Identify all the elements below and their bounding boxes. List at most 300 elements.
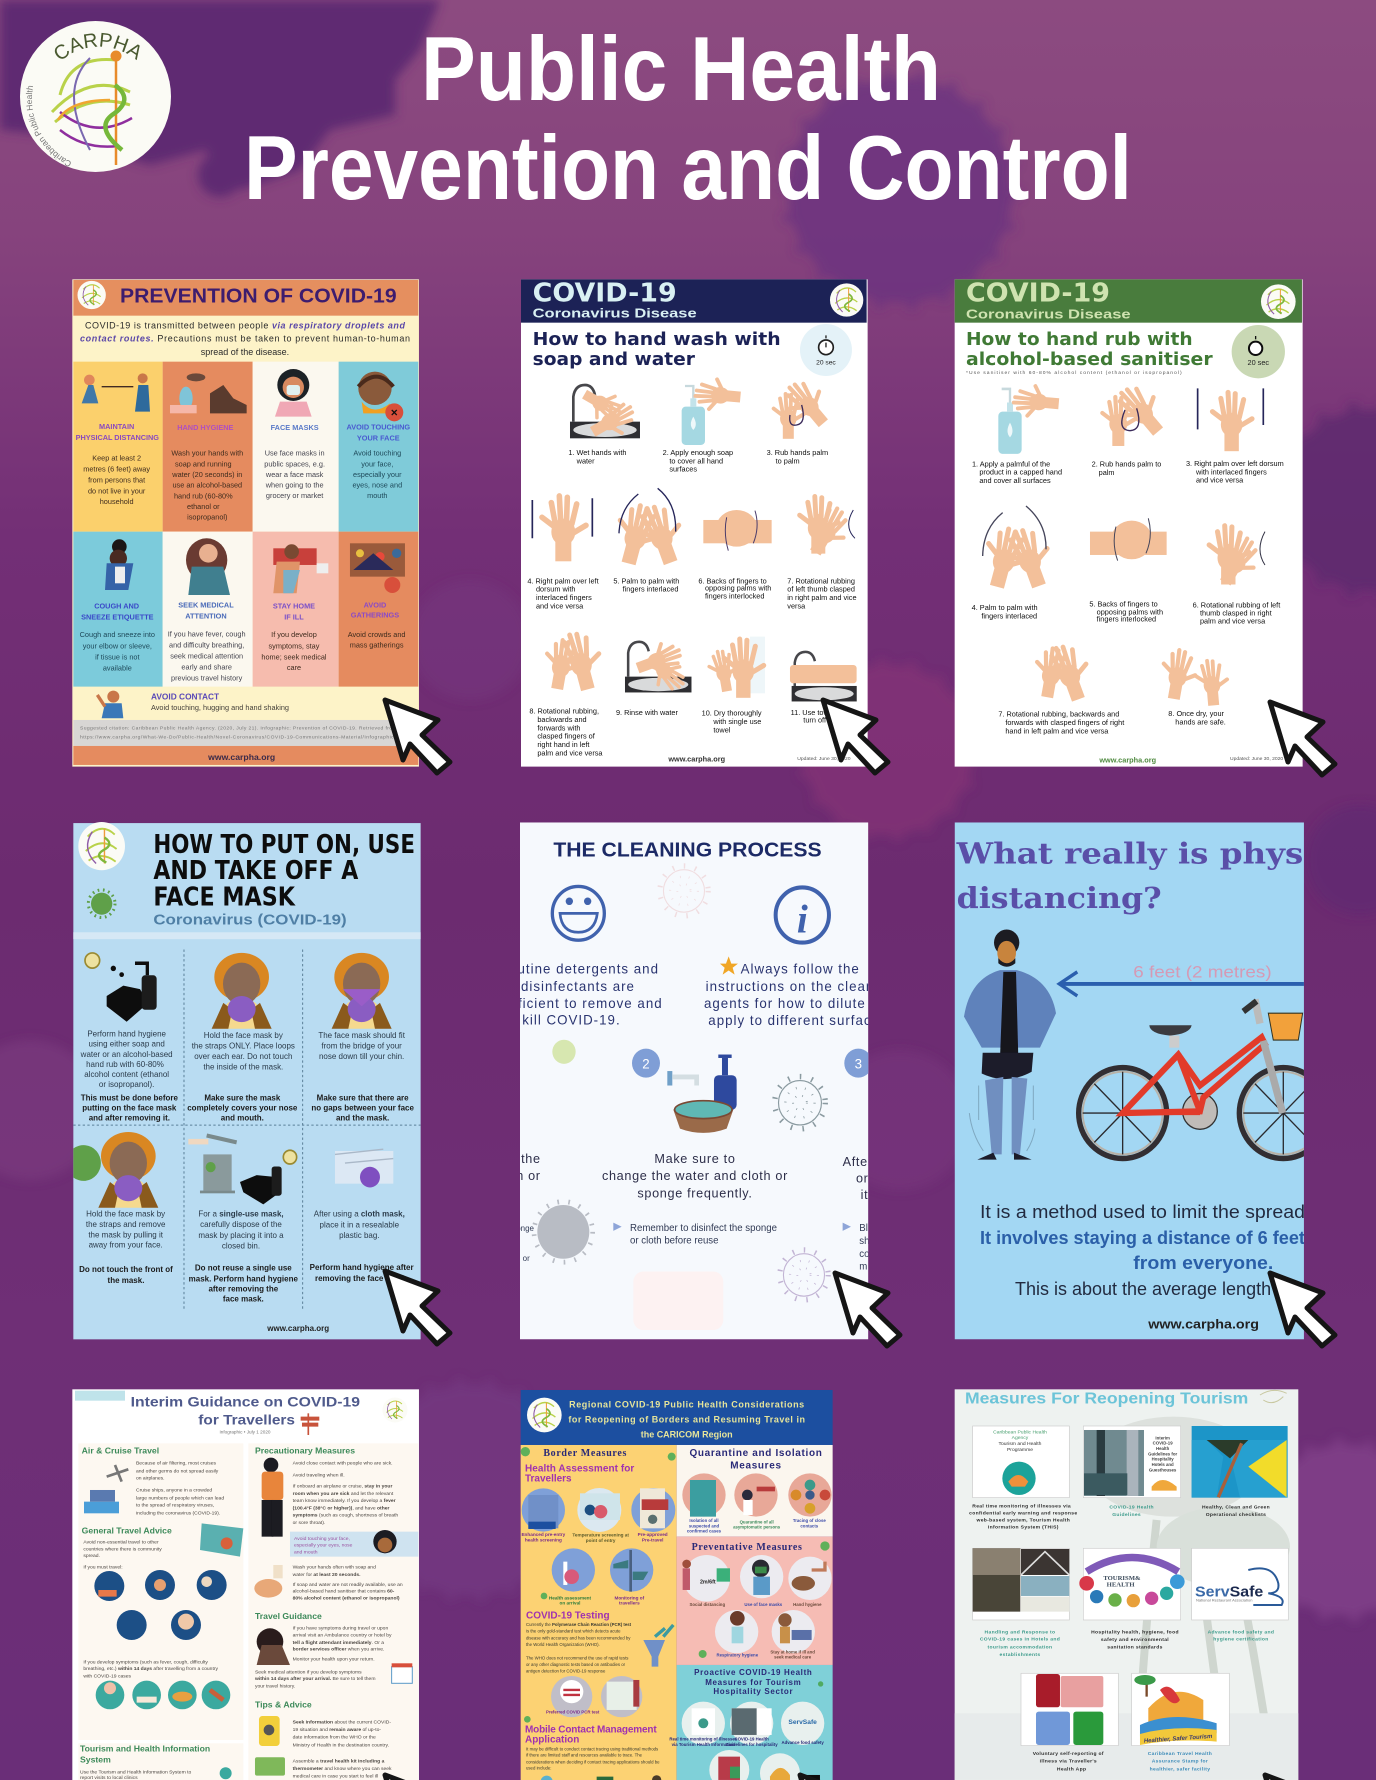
header <box>521 278 867 323</box>
tile: programme: Tourism and Health <box>999 1441 1042 1447</box>
panel body text: and difficulty breathing, <box>169 640 244 649</box>
small body text: date information from the WHO or the <box>293 1735 376 1741</box>
card: regional considerations <box>521 1390 833 1780</box>
section headings: Precautionary Measures <box>255 1445 355 1455</box>
explanation text <box>980 1201 1305 1331</box>
mask instructions: This must be done before <box>81 1093 178 1102</box>
tile captions: Health App <box>1057 1767 1086 1773</box>
quarantine panel: contacts <box>800 1523 819 1528</box>
citation and footer: https://www.carpha.org/What-We-Do/Public-Health/Novel-Coronavirus/COVID-19-Communications-Material/Infographics <box>80 735 397 741</box>
small body text: Seek medical attention if you develop symptoms <box>255 1669 362 1675</box>
mask instructions: The face mask should fit <box>318 1031 406 1040</box>
CARPHA logo <box>20 21 171 172</box>
tile captions: Operational checklists <box>1206 1512 1266 1518</box>
mask instructions <box>79 1029 414 1303</box>
person <box>964 930 1056 1160</box>
header: Regional COVID-19 Public Health Considerations <box>569 1399 804 1409</box>
quarantine panel: Tracing of close <box>793 1518 826 1523</box>
border measures panel: the World Health Organization (WHO). <box>526 1642 600 1647</box>
mask instructions: Hold the face mask by <box>204 1031 284 1040</box>
tile: guidelines: Interim <box>1155 1435 1170 1440</box>
decorative faded virus <box>660 866 708 916</box>
quarantine panel <box>677 1445 833 1537</box>
small body text: spread. <box>83 1553 100 1559</box>
tile: handling <box>973 1548 1069 1620</box>
small body text: medical care in case you start to feel ill <box>293 1773 378 1779</box>
hand rub captions: www.carpha.org <box>1098 755 1156 764</box>
tile captions: establishments <box>1000 1652 1040 1658</box>
mask instructions: water or an alcohol-based <box>80 1050 173 1059</box>
hand rub captions: opposing palms with <box>1097 607 1163 616</box>
section headings: System <box>80 1755 111 1765</box>
border measures panel: Temperature screening at <box>572 1533 629 1538</box>
small body text: Use the Tourism and Health Information System to <box>80 1769 192 1775</box>
tile: guidelines: COVID-19 <box>1153 1441 1173 1446</box>
panel headings: GATHERINGS <box>351 611 399 620</box>
hand wash captions: 4. Right palm over left <box>527 576 599 585</box>
step badges <box>632 1049 872 1078</box>
step badges: 3 <box>855 1056 862 1071</box>
explanation text: from everyone. <box>1133 1252 1273 1273</box>
background palm trees <box>955 1417 1298 1780</box>
preventative measures panel: 2m/6ft <box>700 1579 716 1585</box>
mask instructions: plastic bag. <box>339 1231 380 1240</box>
small body text: If you have symptoms during travel or upon <box>293 1625 388 1631</box>
tourism sector panel <box>669 1665 833 1780</box>
step text: cloth or <box>494 1168 541 1183</box>
mask instructions: For a single-use mask, <box>198 1210 284 1219</box>
panel body text: seek medical attention <box>170 652 243 661</box>
header: COVID-19 <box>966 278 1110 308</box>
intro text: COVID-19 is transmitted between people via respiratory droplets and <box>85 320 405 330</box>
section headings: Travel Guidance <box>255 1611 322 1621</box>
hand wash captions: 8. Rotational rubbing, <box>529 706 599 715</box>
card: cleaning process: THE CLEANING PROCESS <box>553 839 822 862</box>
tile: app <box>1021 1673 1118 1746</box>
small body text: Avoid close contact with people who are sick. <box>293 1461 393 1467</box>
tourism sector panel: Proactive COVID-19 Health <box>694 1668 812 1677</box>
tile captions: Real time monitoring of illnesses via <box>972 1503 1071 1509</box>
tile captions: Caribbean Travel Health <box>1148 1751 1212 1757</box>
timer <box>1232 325 1285 378</box>
panel headings: YOUR FACE <box>357 433 400 442</box>
small body text: (100.4°F (38°C or higher)), and have other <box>293 1505 390 1511</box>
mask instructions: the mask by pulling it <box>88 1230 164 1239</box>
heading: for Travellers <box>198 1411 295 1427</box>
section headings: Tips & Advice <box>255 1700 312 1710</box>
hand rub captions: 7. Rotational rubbing, backwards and <box>998 710 1119 719</box>
small body text: border services officer when you arrive. <box>293 1647 384 1653</box>
bullet notes: sh <box>859 1236 870 1247</box>
tile captions: web-based system, Tourism Health <box>975 1518 1070 1524</box>
border measures panel: Enhanced pre-entry <box>521 1532 566 1537</box>
border measures panel: Mobile Contact Management <box>525 1725 657 1736</box>
border measures panel: Preferred COVID PCR test <box>546 1709 600 1714</box>
heading <box>153 830 415 929</box>
border measures panel: Currently the Polymerase Chain Reaction (PCR) test <box>526 1622 632 1627</box>
mask instructions: using either soap and <box>88 1039 165 1049</box>
heading: AND TAKE OFF A <box>153 856 359 885</box>
tile: programme: Caribbean Public Health <box>993 1429 1047 1435</box>
mask instructions: Do not reuse a single use <box>195 1263 292 1272</box>
hand wash captions: backwards and <box>537 715 587 724</box>
panel body text: previous travel history <box>171 673 243 682</box>
panel headings: STAY HOME <box>273 602 315 611</box>
hand wash captions: clasped fingers of <box>537 732 596 741</box>
hand rub captions: fingers interlocked <box>1097 615 1156 624</box>
tile captions: sanitation standards <box>1107 1644 1163 1650</box>
hand wash captions: 1. Wet hands with <box>568 448 626 457</box>
hand wash captions: towel <box>713 725 731 734</box>
header: Coronavirus Disease <box>966 307 1131 321</box>
panel body text: Avoid crowds and <box>348 630 405 639</box>
icons row 2 <box>105 538 405 595</box>
text column right: apply to different surfaces <box>708 1013 888 1028</box>
intro text <box>80 320 410 357</box>
heading: soap and water <box>533 349 695 370</box>
heading: alcohol-based sanitiser <box>966 349 1213 370</box>
hand rub captions: product in a capped hand <box>979 468 1062 477</box>
section headings <box>80 1445 355 1765</box>
panel headings: AVOID <box>364 600 386 609</box>
border measures panel: if there are limited staff and resources available to trace. The <box>526 1753 643 1758</box>
tile captions: tourism accommodation <box>988 1644 1052 1650</box>
border measures panel: point of entry <box>586 1538 616 1543</box>
border measures panel: Health assessment <box>549 1595 592 1600</box>
hand wash captions: dorsum with <box>536 585 576 594</box>
mask instructions: mask. Perform hand hygiene <box>189 1274 298 1284</box>
text column left <box>520 964 661 1024</box>
small body text: arrival visit an Ambulance country or hotel by <box>293 1633 392 1639</box>
header: for Reopening of Borders and Resuming Travel in <box>568 1414 805 1424</box>
small body text: Ministry of Health in the destination country. <box>293 1743 389 1749</box>
small body text: Cruise ships, anyone in a crowded <box>136 1487 212 1493</box>
tile: programme: Programme <box>1007 1447 1033 1453</box>
mask instructions: Make sure that there are <box>317 1093 409 1102</box>
text column left: sufficient to remove and <box>497 996 663 1011</box>
text column left: disinfectants are <box>521 979 635 994</box>
tile captions: Voluntary self-reporting of <box>1033 1751 1104 1757</box>
tile captions: safety and environmental <box>1101 1637 1169 1643</box>
hand rub captions: 8. Once dry, your <box>1168 709 1225 718</box>
heading: FACE MASK <box>153 882 296 912</box>
card: face mask <box>73 822 421 1339</box>
small body text: to the spread of respiratory viruses, <box>136 1503 214 1509</box>
tile captions: Healthy, Clean and Green <box>1202 1504 1270 1510</box>
panel body text: when going to the <box>265 480 324 489</box>
hand wash captions: 2. Apply enough soap <box>663 448 733 457</box>
icon: info: i <box>797 896 808 941</box>
panel body text: Wash your hands with <box>171 449 243 458</box>
small body text: Avoid touching your face, <box>294 1536 350 1542</box>
panel body text <box>80 449 405 682</box>
bicycle <box>1079 999 1327 1159</box>
mask instructions: alcohol content (ethanol <box>84 1070 169 1079</box>
mask instructions: Perform hand hygiene <box>87 1029 166 1038</box>
hand rub captions: hand in left palm and vice versa <box>1005 726 1109 735</box>
mask instructions: the inside of the mask. <box>203 1062 283 1071</box>
tile captions: Hospitality health, hygiene, food <box>1091 1629 1179 1635</box>
timer: 20 sec <box>816 359 836 366</box>
step text: the <box>521 1151 541 1166</box>
tourism sector panel: ServSafe <box>788 1719 817 1726</box>
text column right: instructions on the cleaning <box>706 979 895 994</box>
small body text: 19 situation and remain aware of up-to- <box>293 1727 381 1733</box>
heading: How to hand rub with <box>966 329 1193 350</box>
small body text: and other germs do not spread easily <box>136 1468 219 1474</box>
tile captions: Handling and Response to <box>985 1629 1055 1635</box>
small body text: alcohol-based hand sanitiser that contains 60- <box>293 1589 395 1595</box>
icon: green virus <box>88 890 115 917</box>
hand wash captions: www.carpha.org <box>667 755 725 764</box>
panel body text: If you develop <box>271 630 317 639</box>
border measures panel: Pre-travel <box>642 1537 663 1542</box>
panel body text: early and share <box>181 662 232 671</box>
preventative measures panel: Social distancing <box>690 1602 725 1607</box>
panel body text: Use face masks in <box>265 449 325 458</box>
preventative measures panel <box>677 1537 833 1665</box>
card: hand wash <box>521 278 868 767</box>
panel body text: hand rub (60-80% <box>174 491 233 500</box>
small body text: Assemble a travel health kit including a <box>293 1758 385 1764</box>
mask instructions: the mask. <box>108 1276 144 1285</box>
tile: stamp: Healthier, Safer Tourism <box>1144 1734 1213 1745</box>
mask instructions: After using a cloth mask, <box>314 1210 405 1219</box>
border measures panel: used include: <box>526 1765 552 1770</box>
hand rub illustrations <box>978 379 1265 707</box>
text column right: Always follow the <box>741 961 860 977</box>
panel body text: Avoid touching <box>353 449 401 458</box>
heading: Interim Guidance on COVID-19 <box>131 1394 360 1410</box>
hand rub captions: palm and vice versa <box>1200 617 1266 626</box>
hand rub captions: and cover all surfaces <box>979 476 1051 485</box>
hand rub captions: 5. Backs of fingers to <box>1089 600 1158 609</box>
panel headings: MAINTAIN <box>99 422 134 431</box>
explanation text: It involves staying a distance of 6 feet <box>980 1227 1305 1248</box>
border measures panel: or any other diagnostic tests based on antibodies or <box>526 1662 626 1667</box>
panel headings: SEEK MEDICAL <box>178 601 234 610</box>
tourism sector panel: Guidelines for hospitality <box>726 1742 778 1747</box>
mask instructions: carefully dispose of the <box>200 1220 282 1229</box>
small body text: symptoms (such as cough, shortness of breath <box>293 1513 398 1519</box>
heading: Coronavirus (COVID-19) <box>153 912 347 929</box>
small body text: on airplanes. <box>136 1476 165 1482</box>
CARPHA logo: CARPHA <box>54 32 140 60</box>
distance arrow: 6 feet (2 metres) <box>1133 963 1272 982</box>
hand rub captions: 4. Palm to palm with <box>972 603 1038 612</box>
hand rub captions: 1. Apply a palmful of the <box>972 460 1050 469</box>
border measures panel: It may be difficult to conduct contact tracing using traditional methods <box>526 1747 658 1752</box>
tile captions: COVID-19 Health <box>1109 1504 1154 1510</box>
mask instructions: or isopropanol). <box>99 1080 154 1089</box>
panel headings: COUGH AND <box>94 601 139 610</box>
title: Public Health <box>421 19 941 120</box>
avoid contact band <box>97 691 289 718</box>
mask instructions: over each ear. Do not touch <box>194 1052 292 1061</box>
tile captions: hygiene certification <box>1213 1637 1269 1643</box>
border measures panel: Application <box>525 1735 579 1746</box>
explanation text: This is about the average length <box>1015 1278 1271 1299</box>
bullet notes: Remember to disinfect the sponge <box>630 1223 778 1234</box>
explanation text: It is a method used to limit the spread <box>980 1201 1305 1222</box>
card: physical distancing <box>955 822 1327 1339</box>
hand wash captions: versa <box>787 601 806 610</box>
border measures panel: health screening <box>525 1537 562 1542</box>
quarantine panel: suspected and <box>689 1523 719 1528</box>
heading: *Use sanitiser with 60-80% alcohol content (ethanol or isopropanol) <box>966 370 1182 376</box>
small body text: Wash your hands often with soap and <box>293 1565 376 1571</box>
border measures panel: COVID-19 Testing <box>526 1610 610 1621</box>
section headings: Air & Cruise Travel <box>82 1445 159 1455</box>
card: hand rub <box>955 278 1303 767</box>
small body text <box>80 1461 403 1780</box>
border measures panel: Travellers <box>525 1474 572 1485</box>
hand rub captions: 6. Rotational rubbing of left <box>1193 600 1280 609</box>
step text: change the water and cloth or <box>602 1168 788 1183</box>
title <box>244 19 1132 219</box>
panel body text: household <box>100 497 134 506</box>
heading: HOW TO PUT ON, USE <box>153 830 415 859</box>
panel body text: Cough and sneeze into <box>80 630 155 639</box>
hand rub captions: 2. Rub hands palm to <box>1092 460 1161 469</box>
tile: ServSafe: National Restaurant Association <box>1196 1598 1252 1603</box>
tile: guidelines: Hospitality <box>1152 1457 1174 1462</box>
timer: 20 sec <box>1248 358 1269 367</box>
border measures panel: Pre-approved <box>638 1532 668 1537</box>
mask instructions: and mouth. <box>221 1114 264 1123</box>
hand wash captions: 7. Rotational rubbing <box>787 576 855 585</box>
panel body text: available <box>103 663 132 672</box>
timer <box>800 324 852 376</box>
panel headings: HAND HYGIENE <box>177 423 234 432</box>
hand rub captions: with interlaced fingers <box>1195 467 1267 476</box>
heading <box>966 329 1213 376</box>
icons row 1: × <box>391 406 398 420</box>
small body text: thermometer and know where you can seek <box>293 1766 392 1772</box>
icon: info <box>776 887 829 943</box>
hand wash captions: with single use <box>712 717 761 726</box>
small body text: including the coronavirus (COVID-19). <box>136 1510 220 1516</box>
hand wash captions: of left thumb clasped <box>787 585 855 594</box>
panel body text: care <box>287 663 301 672</box>
panel body text: Keep at least 2 <box>92 454 141 463</box>
distance arrow <box>1059 963 1304 996</box>
border measures panel: antigen detection for COVID-19 response <box>526 1669 606 1674</box>
tourism sector panel: COVID-19 Health <box>734 1737 769 1742</box>
tile captions: illness via Traveller's <box>1040 1759 1097 1765</box>
border measures panel: on arrival <box>560 1601 580 1606</box>
tile: programme <box>973 1426 1069 1498</box>
preventative measures panel: Preventative Measures <box>692 1542 803 1553</box>
hand wash captions: interlaced fingers <box>536 593 592 602</box>
panel headings: AVOID TOUCHING <box>346 422 410 431</box>
mask instructions: Make sure the mask <box>204 1093 281 1102</box>
small body text: If soap and water are not readily available, use an <box>293 1582 403 1588</box>
panel headings <box>76 422 410 622</box>
border measures panel: considerations when deciding if contact tracing applications should be <box>526 1759 660 1764</box>
mask instructions: the straps and remove <box>86 1220 166 1229</box>
citation and footer: Suggested citation: Caribbean Public Health Agency. (2020, July 21). Infographic: Prevention of COVID-19. Retrieved from <box>80 725 397 731</box>
panel body text: isopropanol) <box>187 512 227 521</box>
hand wash captions: surfaces <box>669 464 697 473</box>
preventative measures panel: Stay at home if ill and <box>770 1649 815 1654</box>
tile: guidelines: Guesthouses <box>1149 1467 1177 1472</box>
card: reopening tourism <box>955 1389 1298 1780</box>
hand wash captions: 5. Palm to palm with <box>613 576 679 585</box>
card: face mask: www.carpha.org <box>266 1324 329 1333</box>
hand rub captions: Updated: June 30, 2020 <box>1230 756 1283 762</box>
tile captions: COVID-19 cases in Hotels and <box>980 1637 1060 1643</box>
small body text: Avoid non-essential travel to other <box>83 1540 159 1546</box>
quarantine panel: Quarantine of all <box>740 1519 774 1524</box>
hand wash captions: fingers interlocked <box>705 591 764 600</box>
border measures panel: disease with accuracy and has been recommended by <box>526 1635 631 1640</box>
text column left: kill COVID-19. <box>522 1012 621 1028</box>
border measures panel: Monitoring of <box>614 1595 645 1600</box>
mask instructions: after removing the <box>208 1284 279 1294</box>
hand wash captions: opposing palms with <box>705 584 771 593</box>
hand wash captions: forwards with <box>537 723 581 732</box>
card: cleaning process <box>520 822 868 1340</box>
small body text: within 14 days after your arrival. Be sure to tell them <box>254 1676 375 1682</box>
tile captions: healthier, safer facility <box>1150 1767 1210 1773</box>
panel body text: if tissue is not <box>95 652 140 661</box>
mask instructions: nose down till your chin. <box>319 1052 404 1061</box>
mask instructions: away from your face. <box>89 1241 163 1250</box>
border measures panel: Health Assessment for <box>525 1464 634 1475</box>
hand rub captions: fingers interlaced <box>981 611 1037 620</box>
hand wash captions: to cover all hand <box>669 456 723 465</box>
intro text: contact routes. Precautions must be taken to prevent human-to-human <box>80 334 410 344</box>
text column left: Routine detergents and <box>498 961 659 977</box>
bullet notes: co <box>859 1249 870 1260</box>
panel body text: mass gatherings <box>350 641 404 650</box>
panel body text: use an alcohol-based <box>172 481 242 490</box>
preventative measures panel: Hand hygiene <box>793 1602 822 1607</box>
explanation text: www.carpha.org <box>1147 1316 1259 1331</box>
panel body text: metres (6 feet) away <box>83 465 150 474</box>
tourism sector panel: Measures for Tourism <box>705 1678 801 1687</box>
mask instructions: Perform hand hygiene after <box>310 1263 414 1272</box>
step text: it <box>861 1187 868 1202</box>
small body text: and mouth <box>294 1549 318 1555</box>
mask instructions: and after removing it. <box>89 1114 170 1123</box>
panel body text: wear a face mask <box>265 470 324 479</box>
panel body text: eyes, nose and <box>352 480 402 489</box>
mask instructions: face mask. <box>223 1294 264 1303</box>
panel body text: your elbow or sleeve, <box>83 642 152 651</box>
card: prevention of COVID-19 <box>72 279 419 767</box>
section headings: Tourism and Health Information <box>80 1744 210 1754</box>
hand wash captions: 6. Backs of fingers to <box>698 576 767 585</box>
tile: pillars: HEALTH <box>1107 1582 1135 1589</box>
panel body text: If you have fever, cough <box>168 630 246 639</box>
panel body text: ethanol or <box>187 502 220 511</box>
tile captions: Assurance Stamp for <box>1152 1759 1208 1765</box>
small body text: especially your eyes, nose <box>294 1543 353 1549</box>
small body text: large numbers of people which can lead <box>136 1495 224 1501</box>
hand wash captions: water <box>576 456 595 465</box>
tile: pillars <box>1079 1548 1185 1620</box>
panel body text: home; seek medical <box>261 652 327 661</box>
icon: tap, soap and basin <box>667 1055 737 1133</box>
small body text: Avoid traveling when ill. <box>293 1473 345 1479</box>
mask instructions: mask by placing it into a <box>198 1231 284 1240</box>
small body text: Seek information about the current COVID- <box>293 1719 391 1725</box>
mask instructions: from the bridge of your <box>321 1042 402 1051</box>
border measures panel: travellers <box>619 1601 640 1606</box>
small body text: tell a flight attendant immediately. Or a <box>293 1640 384 1646</box>
